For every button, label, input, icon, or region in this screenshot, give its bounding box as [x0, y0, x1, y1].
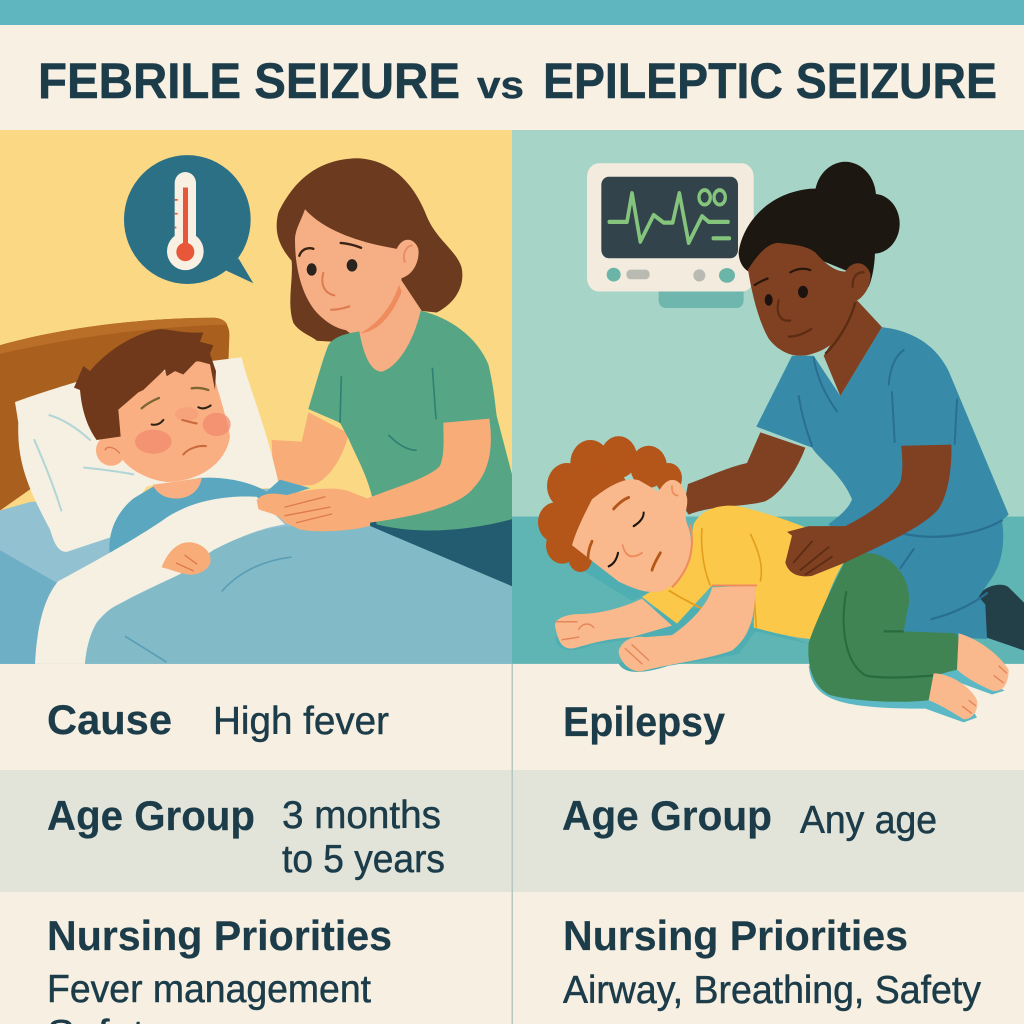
row: age group: Any age — [800, 799, 937, 842]
row: age group: Age Group — [47, 792, 255, 839]
title: FEBRILE SEIZURE — [38, 53, 460, 109]
mother — [272, 158, 512, 591]
icon: thermometer speech bubble — [124, 155, 253, 284]
row: age group: Age Group — [562, 792, 772, 839]
row: nursing priorities: Nursing Priorities — [47, 912, 392, 959]
row: cause — [47, 696, 726, 745]
row: nursing priorities: Airway, Breathing, Safety — [563, 969, 981, 1012]
nurse hand — [785, 445, 951, 576]
row: nursing priorities — [47, 912, 981, 1024]
headboard — [0, 318, 229, 511]
row: cause: Epilepsy — [563, 698, 726, 745]
row: age group: to 5 years — [282, 838, 445, 881]
hands — [162, 489, 372, 575]
sick boy — [74, 329, 310, 564]
title: vs — [477, 65, 524, 107]
row: nursing priorities: Nursing Priorities — [563, 912, 908, 959]
pillow — [15, 357, 279, 552]
row: cause: High fever — [213, 700, 389, 743]
row: nursing priorities: Fever management — [47, 968, 371, 1011]
row: age group: 3 months — [282, 794, 441, 837]
title: EPILEPTIC SEIZURE — [543, 53, 997, 109]
title — [38, 53, 997, 109]
icon: heart monitor — [587, 163, 754, 308]
row: cause: Cause — [47, 696, 172, 743]
row: age group — [47, 792, 937, 881]
table rows — [0, 664, 1024, 1024]
panel: febrile seizure illustration — [0, 130, 512, 664]
nurse — [684, 162, 1024, 650]
panel: epileptic seizure illustration — [512, 130, 1024, 722]
bed sheet — [0, 488, 512, 664]
child in recovery position — [538, 436, 1009, 722]
blanket — [35, 496, 512, 664]
